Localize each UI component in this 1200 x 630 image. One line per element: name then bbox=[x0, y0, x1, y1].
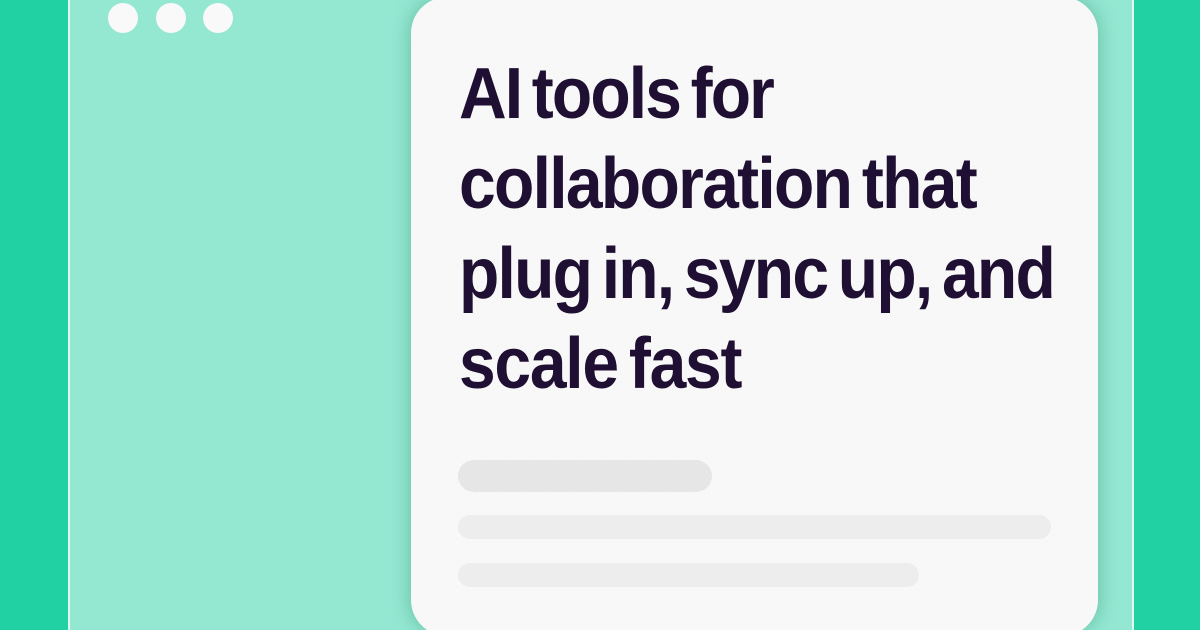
title: collaboration that bbox=[459, 142, 976, 223]
content card bbox=[411, 0, 1098, 630]
placeholder heading bar bbox=[458, 460, 712, 492]
title: plug in, sync up, and bbox=[459, 232, 1054, 313]
title bbox=[459, 52, 1054, 403]
placeholder text bar 1 bbox=[458, 515, 1051, 539]
title: AI tools for bbox=[459, 52, 773, 133]
window control dots bbox=[108, 3, 233, 33]
placeholder text bar 2 bbox=[458, 563, 919, 587]
title: scale fast bbox=[459, 322, 741, 403]
